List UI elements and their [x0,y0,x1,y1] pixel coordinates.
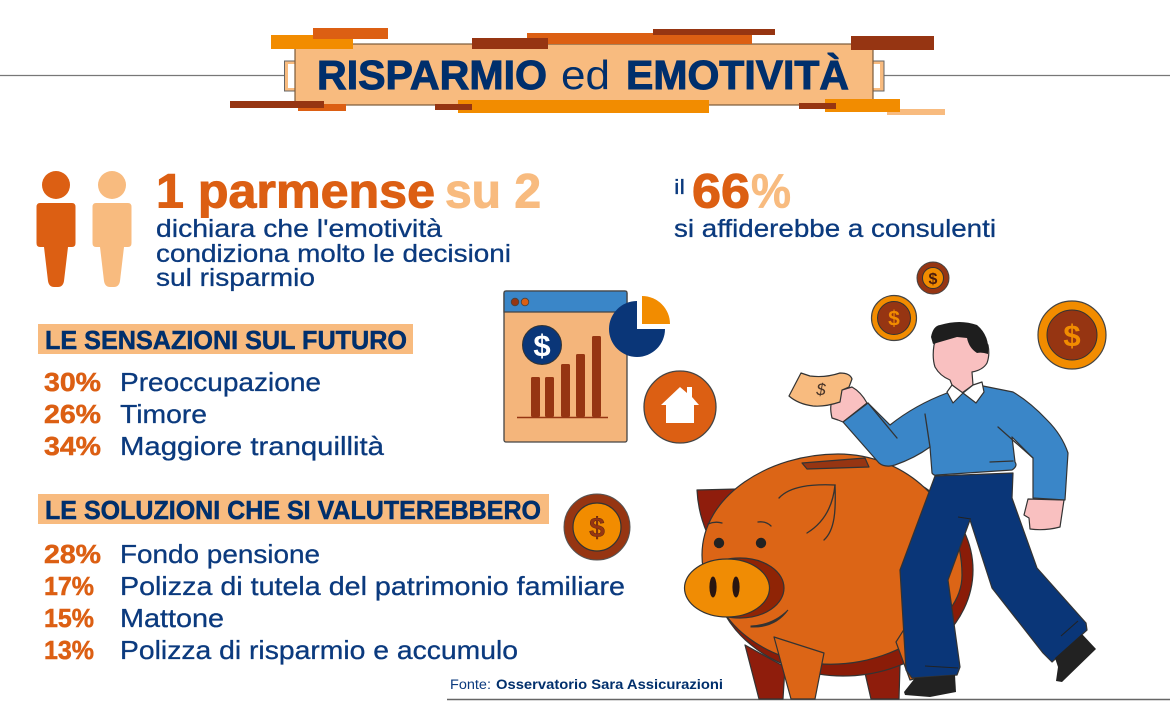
icon: coin large: $ [1063,318,1081,353]
headline: 1 parmense su 2 [156,166,541,218]
list: soluzioni: Fondo pensione [120,539,320,569]
banknote [789,373,852,406]
stat: 66% consulenti: si affiderebbe a consulenti [674,215,996,243]
source: Osservatorio Sara Assicurazioni [496,677,723,692]
icon: pie chart [609,296,670,357]
headline: 1 parmense su 2: 1 parmense [156,166,435,218]
icon: two people [36,171,132,287]
illustration: piggy bank [684,454,973,699]
stat: 66% consulenti: % [751,166,791,218]
list: soluzioni: 15% [44,603,94,633]
stat: 66% consulenti: 66 [692,166,750,218]
panel: sensazioni sul futuro [38,324,413,461]
text block: emotività: sul risparmio [156,264,315,292]
legs [900,473,1087,678]
list: sensazioni: 34% [44,431,101,461]
title banner [230,28,945,115]
icon: coin medium [872,296,916,340]
list: sensazioni: 26% [44,399,101,429]
stat: 66% consulenti: il [674,177,685,199]
title text: EMOTIVITÀ [626,52,849,98]
list: sensazioni [44,367,385,461]
heading: sensazioni: LE SENSAZIONI SUL FUTURO [45,325,407,355]
list: soluzioni: Polizza di tutela del patrimonio familiare [120,571,625,601]
icon: coin large [1038,301,1106,369]
text block: emotività [156,215,511,292]
list: sensazioni: Preoccupazione [120,367,321,397]
icon: coin left [564,494,630,560]
list: soluzioni: 17% [44,571,94,601]
collar [947,382,984,403]
icon: coin small: $ [929,271,938,288]
headline: 1 parmense su 2: su 2 [445,166,541,218]
banknote: $ [815,380,826,399]
icon: coin small [917,262,949,294]
list: sensazioni: Timore [120,399,207,429]
icon: chart window [504,291,627,442]
icon: coin medium: $ [888,308,900,330]
left hand [831,387,867,422]
list: soluzioni: Polizza di risparmio e accumulo [120,635,518,665]
stat: 66% consulenti [674,166,996,243]
title text: ed [561,52,610,98]
panel: soluzioni [38,494,625,665]
illustration: man [789,322,1096,697]
neck and face [933,328,989,393]
list: soluzioni: 13% [44,635,94,665]
icon: coin left: $ [589,512,605,543]
list: soluzioni: Mattone [120,603,224,633]
list: soluzioni: 28% [44,539,101,569]
hair [931,322,988,354]
source: Fonte: [450,677,491,692]
list: soluzioni [44,539,625,665]
sweater [843,386,1068,500]
icon: chart window: $ [533,328,551,363]
list: sensazioni: 30% [44,367,101,397]
text block: emotività: dichiara che l'emotività [156,215,442,243]
right hand [1024,499,1064,530]
shoes [904,675,956,697]
text block: emotività: condiziona molto le decisioni [156,240,511,268]
heading: soluzioni: LE SOLUZIONI CHE SI VALUTEREBBERO [45,495,541,525]
icon: house coin [644,371,716,443]
title text: RISPARMIO [317,52,547,98]
list: sensazioni: Maggiore tranquillità [120,431,385,461]
